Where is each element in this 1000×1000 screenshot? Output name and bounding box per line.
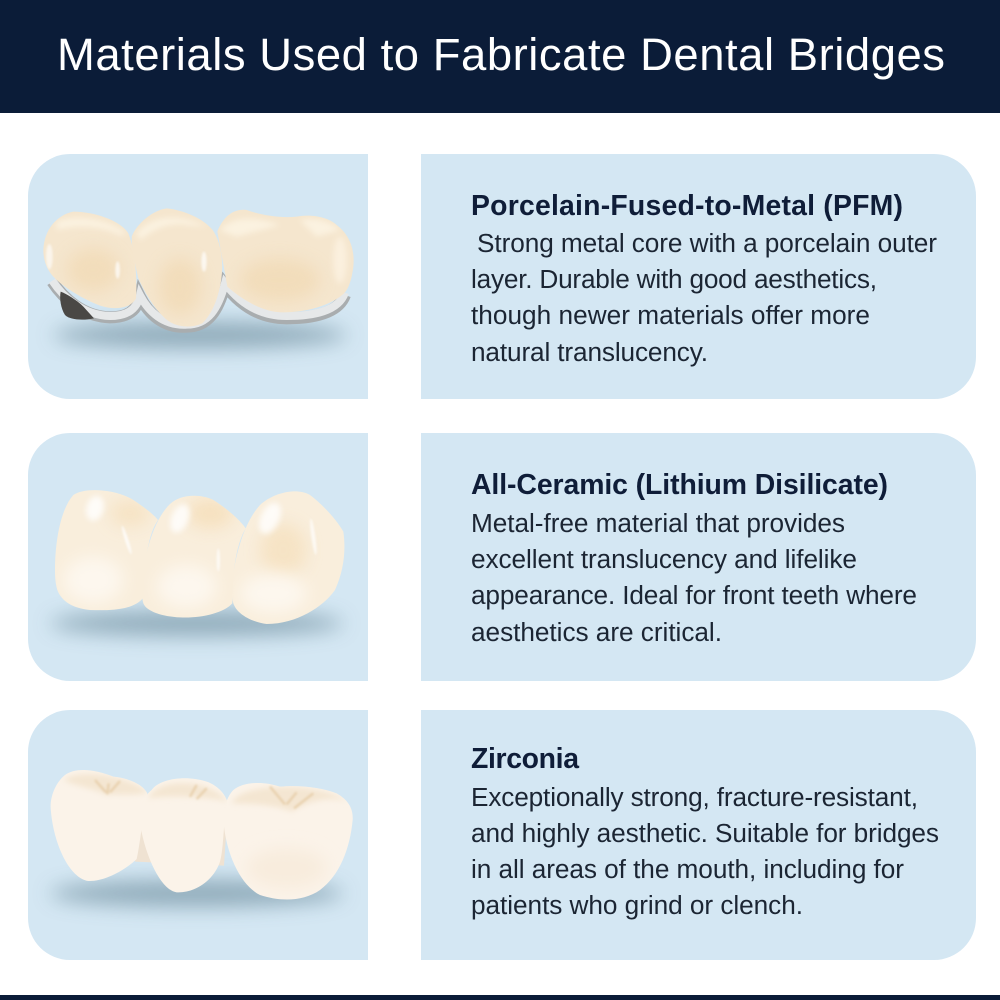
footer bar — [0, 995, 1000, 1000]
text block: PFM body — [471, 228, 937, 367]
text block: PFM body: though newer materials offer more — [471, 300, 870, 330]
text block: PFM body: layer. Durable with good aesthetics, — [471, 264, 877, 294]
text block: zirconia body — [471, 782, 939, 920]
heading: zirconia: Zirconia — [471, 743, 579, 775]
title: Materials Used to Fabricate Dental Bridges — [57, 29, 945, 80]
image: zirconia bridge — [50, 770, 353, 907]
text block: zirconia body: in all areas of the mouth, including for — [471, 854, 904, 884]
panel: PFM description — [421, 154, 976, 399]
text block: zirconia body: and highly aesthetic. Suitable for bridges — [471, 818, 939, 848]
panel: all-ceramic description — [421, 433, 976, 681]
heading: all-ceramic: All-Ceramic (Lithium Disilicate) — [471, 469, 888, 501]
text block: PFM body: natural translucency. — [471, 337, 708, 367]
text block: all-ceramic body: Metal-free material that provides — [471, 508, 845, 538]
header banner — [0, 0, 1000, 113]
heading: PFM: Porcelain-Fused-to-Metal (PFM) — [471, 190, 903, 222]
text block: zirconia body: patients who grind or clench. — [471, 890, 803, 920]
text block: all-ceramic body: appearance. Ideal for front teeth where — [471, 580, 917, 610]
panel: PFM image — [28, 154, 368, 399]
text block: all-ceramic body: aesthetics are critical. — [471, 617, 722, 647]
panel: zirconia image — [28, 710, 368, 960]
text block: zirconia body: Exceptionally strong, fracture-resistant, — [471, 782, 918, 812]
text block: all-ceramic body — [471, 508, 917, 647]
text block: all-ceramic body: excellent translucency and lifelike — [471, 544, 857, 574]
panel: zirconia description — [421, 710, 976, 960]
image: porcelain-fused-to-metal bridge — [43, 208, 354, 348]
panel: all-ceramic image — [28, 433, 368, 681]
text block: PFM body: Strong metal core with a porcelain outer — [477, 228, 937, 258]
image: all-ceramic bridge — [50, 490, 344, 636]
